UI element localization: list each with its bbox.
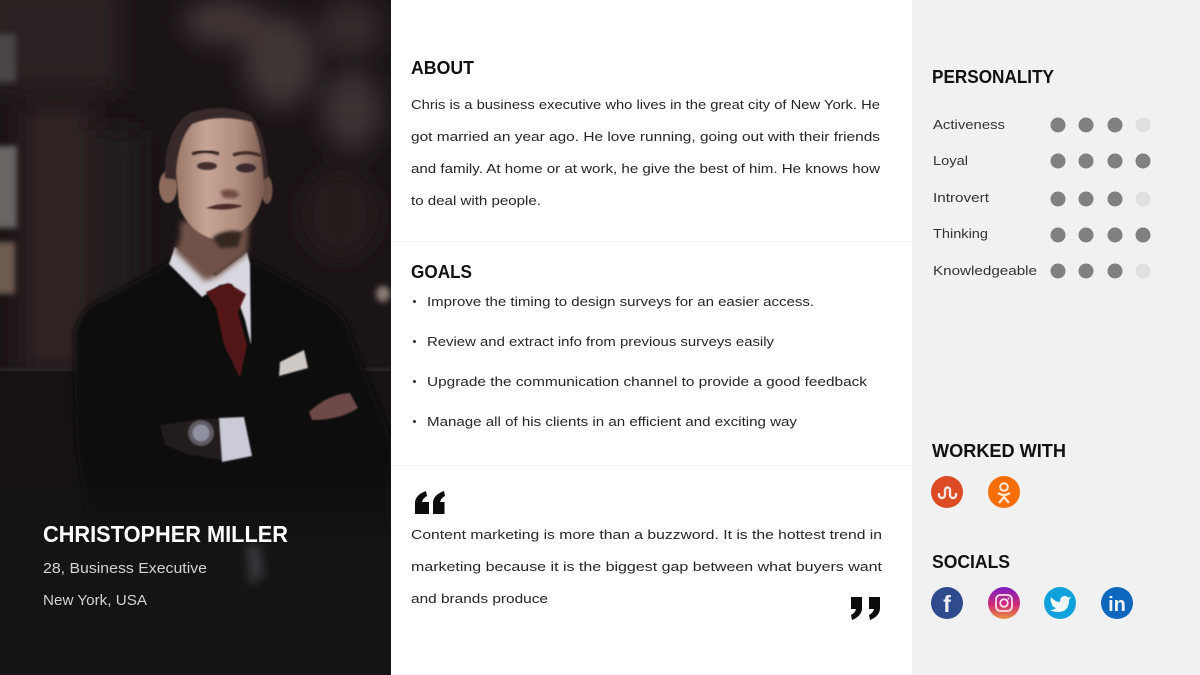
text: about paragraph: and family. At home or at work, he give the best of him. He knows how xyxy=(411,161,881,176)
figure: businessman xyxy=(72,108,391,478)
text: about paragraph xyxy=(411,97,881,208)
icon: opening quote mark xyxy=(415,491,445,514)
panel: about xyxy=(411,57,881,208)
rating: thinking xyxy=(933,226,1150,242)
heading: personality: PERSONALITY xyxy=(932,66,1055,87)
rating: knowledgeable xyxy=(933,263,1150,278)
icon: linkedin: in xyxy=(1108,594,1126,616)
list: goals: Upgrade the communication channel to provide a good feedback xyxy=(427,374,868,389)
text: location: New York, USA xyxy=(43,592,147,609)
rating: activeness: Activeness xyxy=(933,117,1006,132)
icon: odnoklassniki xyxy=(988,476,1020,508)
text: about paragraph: Chris is a business executive who lives in the great city of New York. He xyxy=(411,97,880,112)
panel: personality sidebar background xyxy=(912,0,1200,675)
heading: goals: GOALS xyxy=(411,261,472,282)
heading: about: ABOUT xyxy=(411,57,475,78)
icon: stumbleupon xyxy=(931,476,963,508)
rating: introvert xyxy=(933,190,1150,206)
lower wall xyxy=(22,371,74,380)
list: goals xyxy=(413,294,868,429)
rating: loyal: Loyal xyxy=(933,153,968,168)
icon: instagram xyxy=(988,587,1020,619)
heading: name: CHRISTOPHER MILLER xyxy=(43,521,288,547)
heading: socials: SOCIALS xyxy=(932,551,1010,572)
list: goals: Manage all of his clients in an efficient and exciting way xyxy=(427,414,798,429)
text: age and occupation: 28, Business Executive xyxy=(43,560,207,577)
text: quote: Content marketing is more than a buzzword. It is the hottest trend in xyxy=(411,527,882,542)
text: about paragraph: got married an year ago. He love running, going out with their friends xyxy=(411,129,881,144)
list: goals: Review and extract info from previous surveys easily xyxy=(427,334,775,349)
list: goals: Improve the timing to design surveys for an easier access. xyxy=(427,294,814,309)
panel: quote xyxy=(411,491,882,620)
text: quote xyxy=(411,527,882,606)
icon: facebook xyxy=(931,587,963,619)
panel: photo xyxy=(0,0,392,675)
text: quote: and brands produce xyxy=(411,591,548,606)
text: about paragraph: to deal with people. xyxy=(411,193,541,208)
icon: twitter xyxy=(1044,587,1076,619)
icon: linkedin xyxy=(1101,587,1133,619)
heading: worked with: WORKED WITH xyxy=(932,440,1066,461)
rating: thinking: Thinking xyxy=(933,226,988,241)
rating: loyal xyxy=(933,153,1150,168)
icon: closing quote mark xyxy=(851,597,880,620)
rating: knowledgeable: Knowledgeable xyxy=(933,263,1037,278)
panel: goals xyxy=(411,261,868,429)
text: quote: marketing because it is the biggest gap between what buyers want xyxy=(411,559,882,574)
rating: introvert: Introvert xyxy=(933,190,989,205)
icon: facebook: f xyxy=(943,591,951,617)
rating: activeness xyxy=(933,117,1150,132)
